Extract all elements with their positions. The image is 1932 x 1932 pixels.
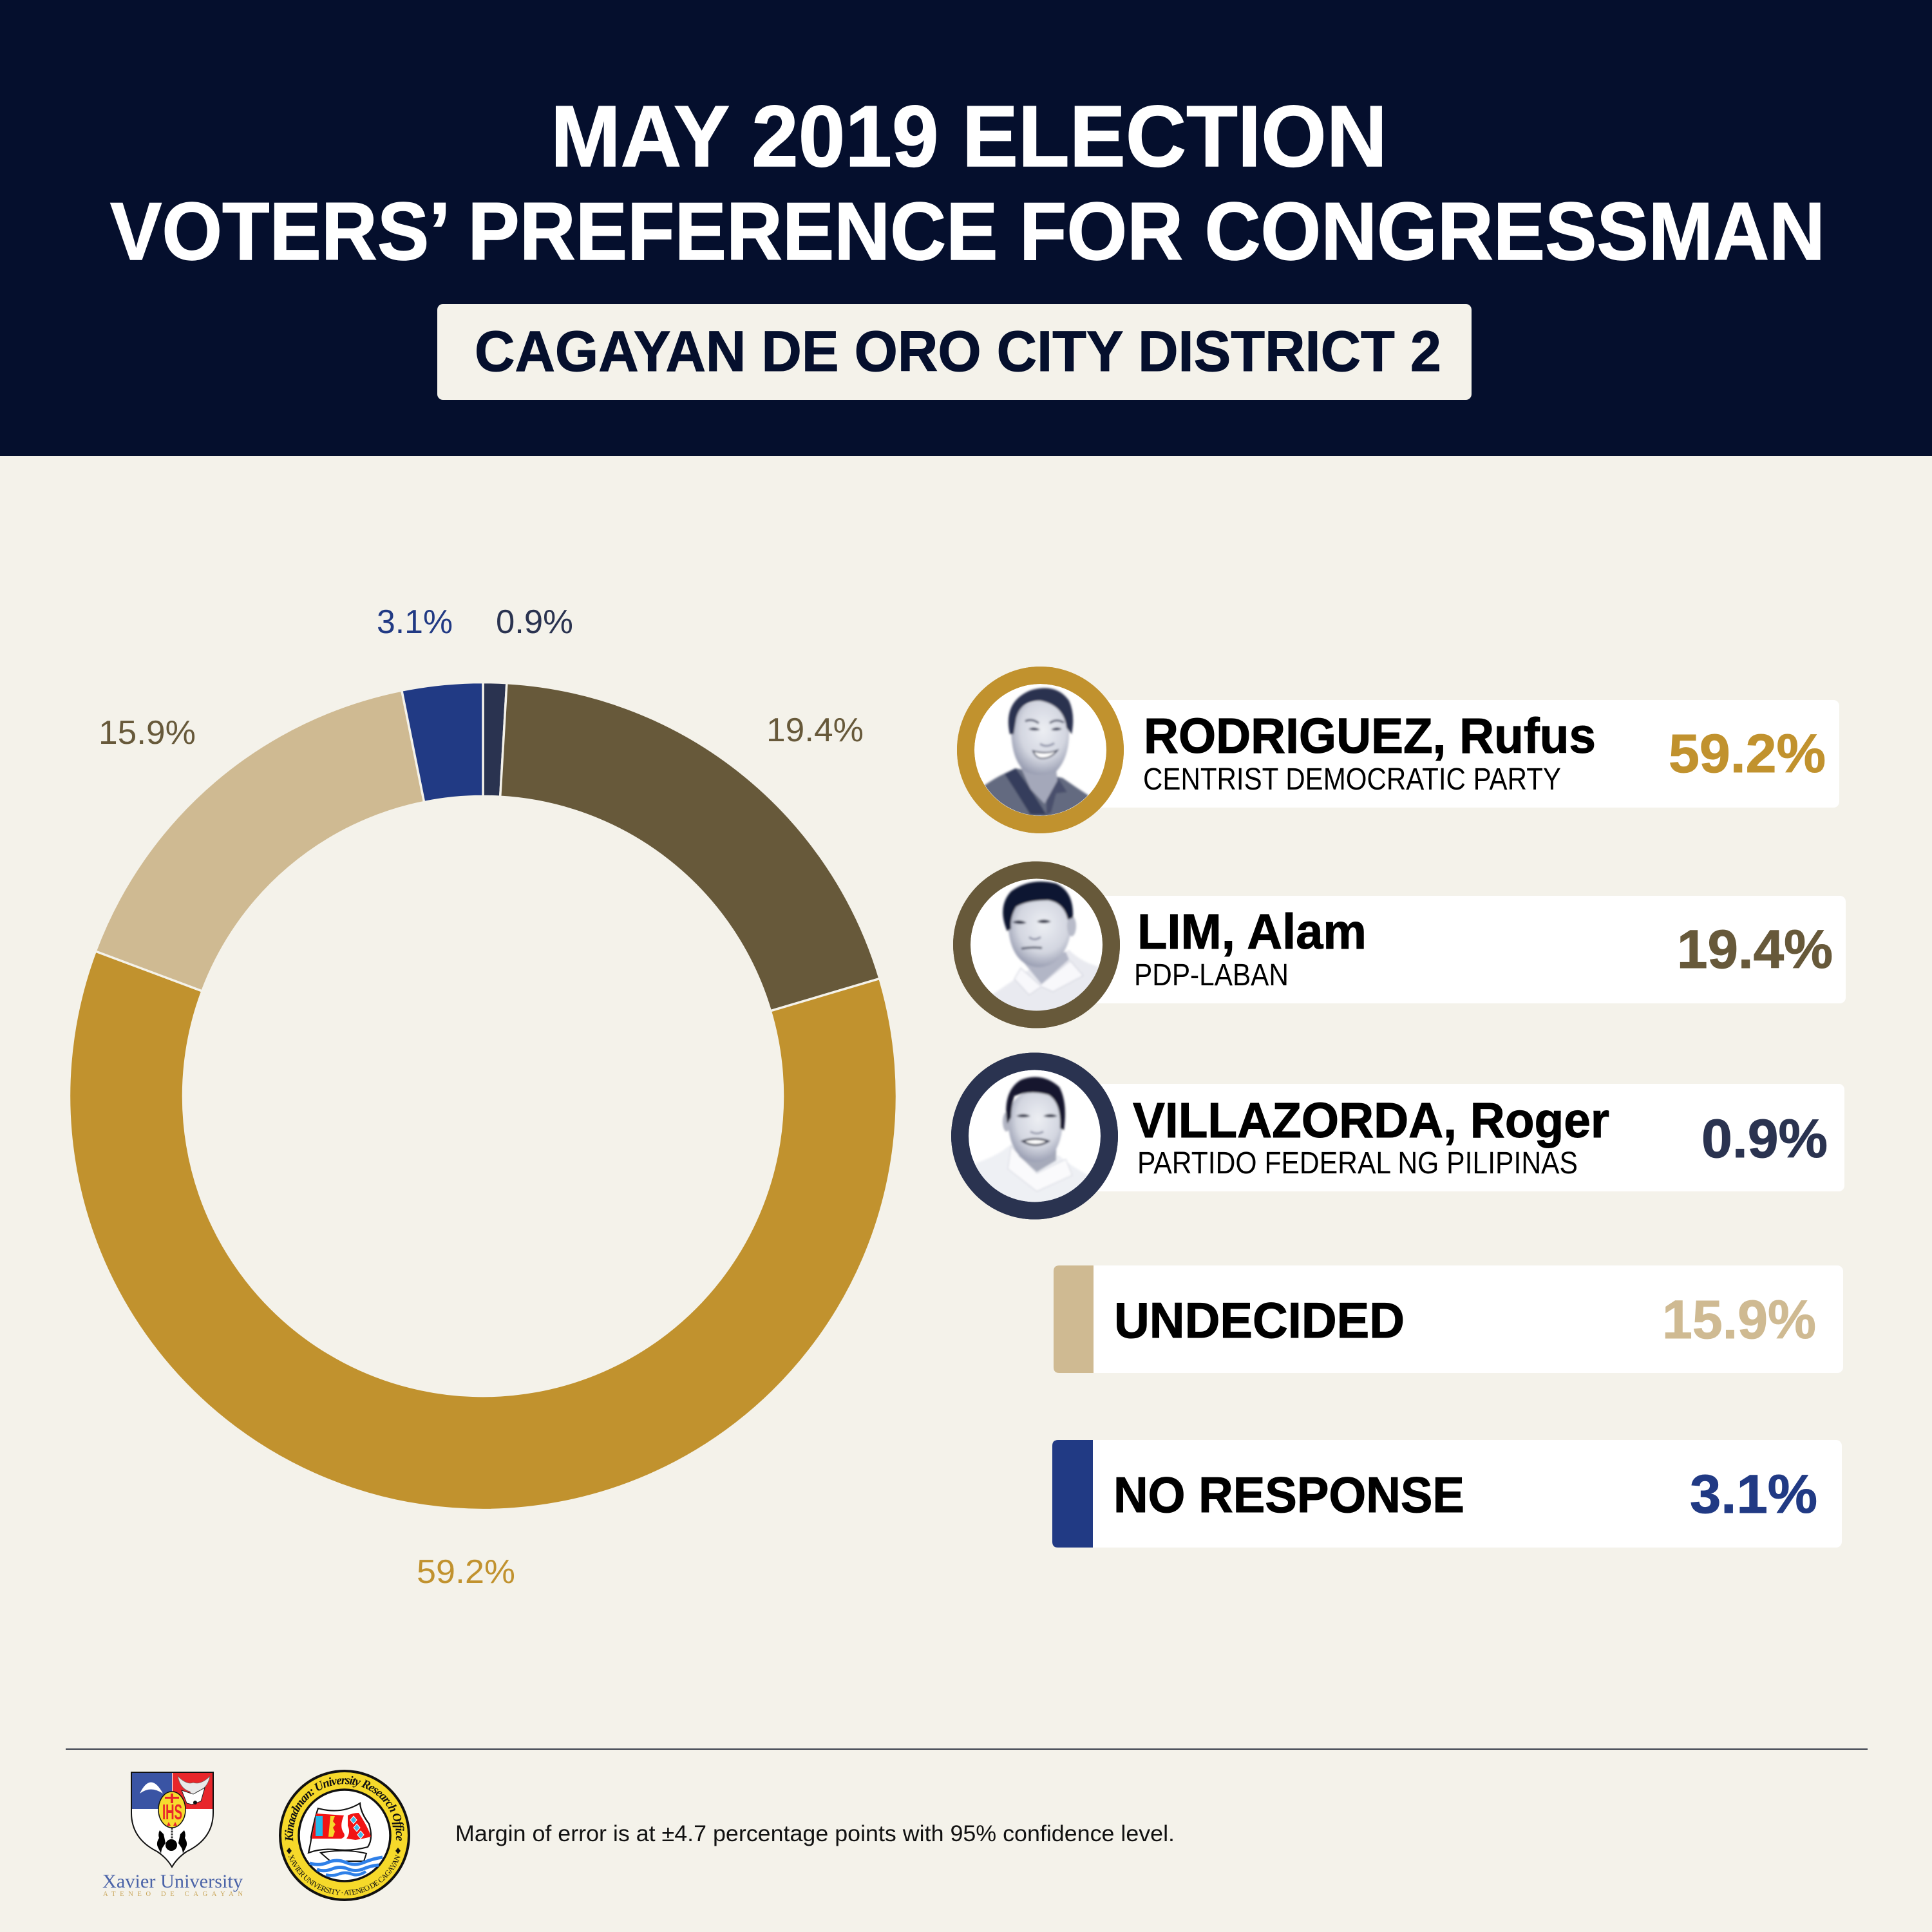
card	[1069, 896, 1846, 1003]
seal diamonds	[287, 1848, 401, 1854]
label: NO RESPONSE	[1113, 1466, 1464, 1523]
row: no response	[1052, 1440, 1842, 1548]
party: CENTRIST DEMOCRATIC PARTY	[1143, 762, 1561, 797]
slice: Lim 19.4%	[500, 683, 880, 1011]
slice: Rodriguez 59.2%	[69, 951, 896, 1510]
logo: Xavier University	[102, 1772, 243, 1898]
name: RODRIGUEZ, Rufus	[1144, 708, 1596, 764]
ship icon	[308, 1803, 383, 1875]
crest shield: IHS	[162, 1800, 182, 1824]
subtitle pill: CAGAYAN DE ORO CITY DISTRICT 2	[475, 319, 1441, 383]
donut label: no response: 3.1%	[377, 603, 453, 641]
wordmark: Xavier University	[102, 1871, 243, 1892]
swatch	[1054, 1265, 1094, 1373]
donut label: Rodriguez: 59.2%	[417, 1553, 515, 1591]
candidate row: Rodriguez	[966, 675, 1839, 828]
percentage: 15.9%	[1662, 1289, 1816, 1350]
header band	[0, 0, 1932, 456]
donut chart	[69, 683, 896, 1510]
seal text: bottom: XAVIER UNIVERSITY · ATENEO DE CAGAYAN	[289, 1854, 401, 1895]
title line 2: VOTERS’ PREFERENCE FOR CONGRESSMAN	[110, 185, 1825, 277]
portrait: Rodriguez	[966, 675, 1115, 828]
swatch	[1052, 1440, 1093, 1548]
slice: No response 3.1%	[402, 683, 483, 802]
title line 1: MAY 2019 ELECTION	[551, 88, 1387, 185]
candidate row: Lim	[962, 870, 1846, 1021]
donut label: Lim: 19.4%	[766, 712, 864, 749]
slice: Undecided 15.9%	[95, 690, 424, 991]
card	[1069, 700, 1839, 808]
tagline: ATENEO DE CAGAYAN	[103, 1891, 243, 1898]
name: LIM, Alam	[1137, 904, 1367, 960]
donut label: Villazorda: 0.9%	[496, 603, 573, 641]
percentage: 3.1%	[1690, 1464, 1817, 1524]
party: PDP-LABAN	[1134, 958, 1289, 992]
subtitle pill	[437, 304, 1472, 400]
row: undecided	[1054, 1265, 1843, 1373]
crest shield	[131, 1772, 213, 1867]
logo: Kinaadman University Research Office seal	[279, 1770, 410, 1901]
party: PARTIDO FEDERAL NG PILIPINAS	[1137, 1146, 1578, 1180]
seal text: top: Kinaadman: University Research Office	[285, 1776, 404, 1842]
candidate row: Villazorda	[960, 1061, 1844, 1211]
card	[1069, 1084, 1844, 1191]
slice: Villazorda 0.9%	[483, 683, 507, 797]
name: VILLAZORDA, Roger	[1133, 1093, 1609, 1148]
label: UNDECIDED	[1114, 1292, 1405, 1349]
percentage: 19.4%	[1677, 919, 1833, 980]
portrait: Lim	[962, 870, 1112, 1021]
margin of error note: Margin of error is at ±4.7 percentage points with 95% confidence level.	[455, 1821, 1175, 1846]
percentage: 0.9%	[1701, 1108, 1828, 1169]
donut label: undecided: 15.9%	[99, 714, 196, 752]
portrait: Villazorda	[960, 1061, 1109, 1211]
percentage: 59.2%	[1669, 723, 1826, 784]
